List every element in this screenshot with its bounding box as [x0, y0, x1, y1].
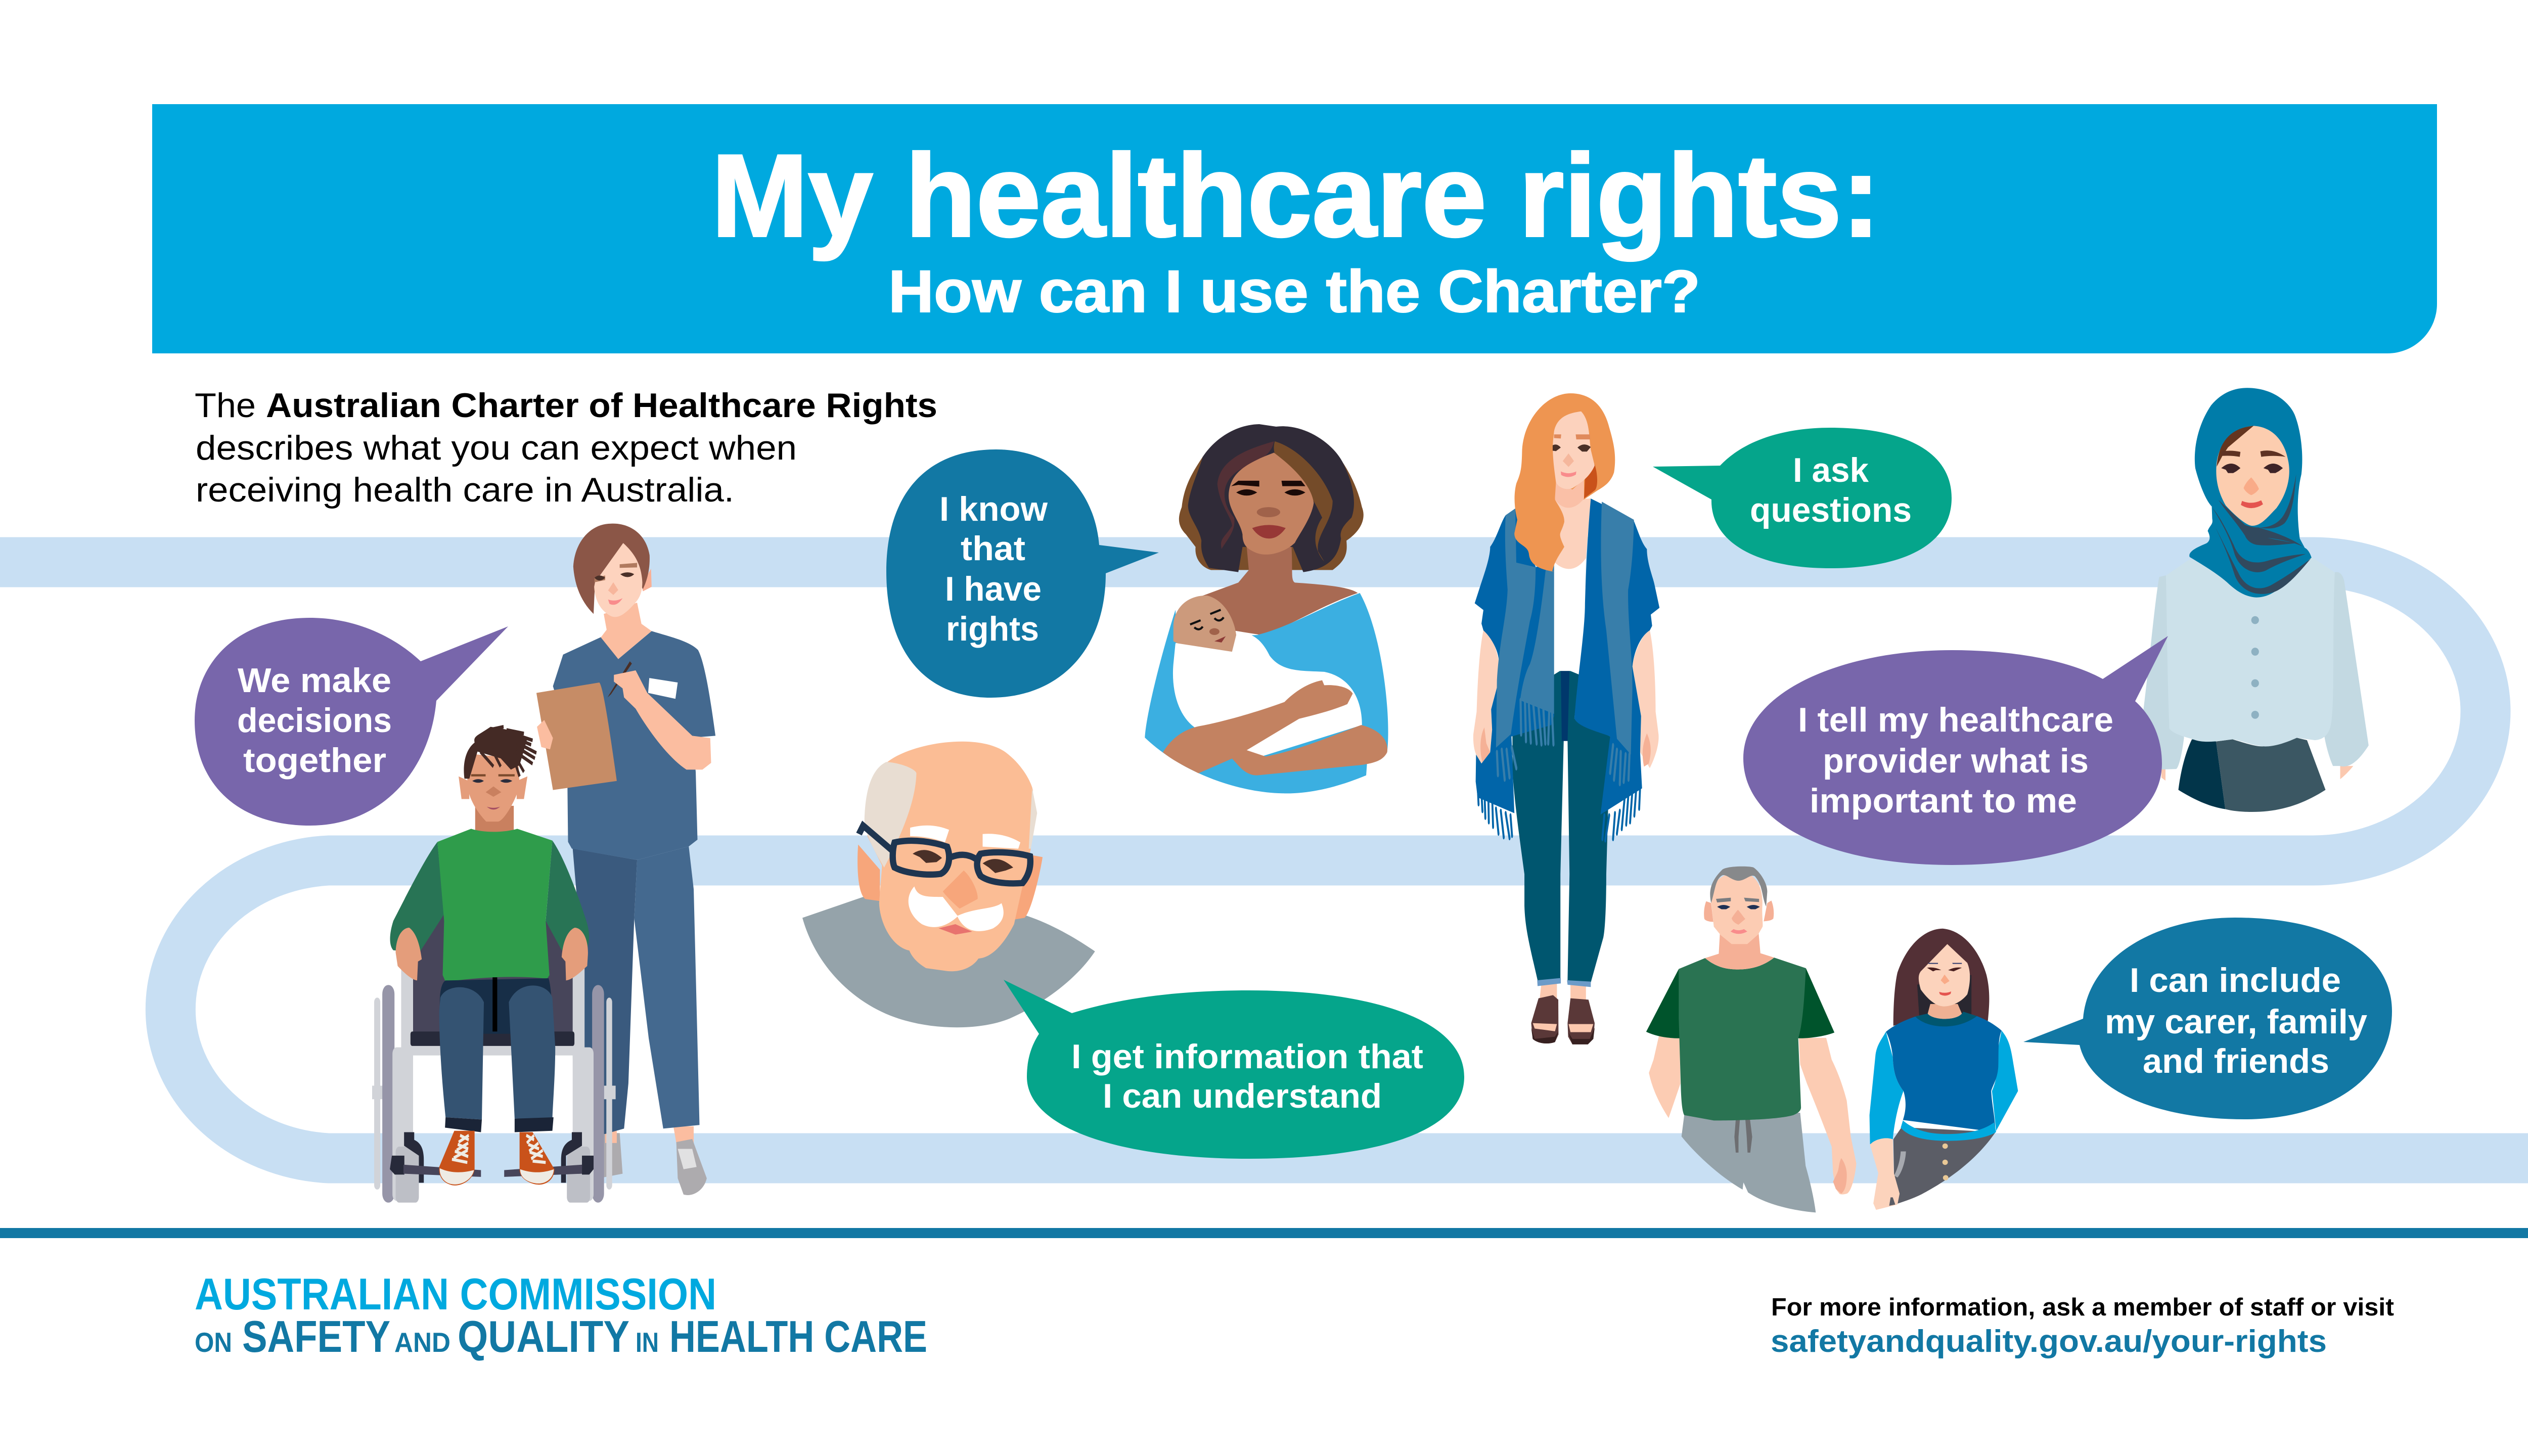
buttons [2251, 616, 2259, 719]
footer contact information [1771, 1294, 2394, 1359]
figure: man in green t-shirt [1646, 867, 1857, 1212]
footer rule [0, 1228, 2528, 1238]
figure: mother with baby [1145, 424, 1388, 793]
speech bubble: I know that I have rights: I know [939, 490, 1048, 528]
commission logo wordmark: HEALTH CARE [669, 1311, 927, 1361]
intro text block: Australian Charter of Healthcare Rights [266, 386, 937, 425]
figure: woman in blue sweater [1870, 929, 2018, 1210]
speech bubble: I know that I have rights: that [961, 529, 1025, 568]
speech bubble: I get information that I can understand [1004, 980, 1464, 1159]
commission logo wordmark: SAFETY [242, 1311, 390, 1361]
footer contact information: safetyandquality.gov.au/your-rights [1771, 1324, 2327, 1359]
scarf folds [2212, 474, 2311, 594]
commission logo wordmark: IN [636, 1327, 659, 1358]
footer contact information: For more information, ask a member of staff or visit [1771, 1294, 2394, 1321]
speech bubble: I tell my healthcare provider: provider what is [1823, 742, 2089, 780]
cardigan [1475, 498, 1659, 814]
intro text block: describes what you can expect when [196, 429, 797, 467]
baby blanket [1173, 631, 1362, 756]
speech bubble: I can include my carer, family and friends [2023, 918, 2392, 1119]
fringe [1477, 700, 1640, 840]
figure: woman with fringed cardigan [1473, 393, 1659, 1044]
speech bubble: we make decisions together: We make [238, 661, 391, 700]
figure: nurse with clipboard [536, 524, 715, 1195]
speech bubble: I ask questions: questions [1750, 491, 1912, 529]
headscarf [2189, 388, 2312, 598]
glasses [859, 826, 1030, 883]
speech bubble: I know that I have rights [886, 449, 1159, 698]
figure: elderly man with glasses [802, 742, 1095, 1027]
speech bubble: I ask questions [1653, 428, 1952, 568]
commission logo wordmark: AND [394, 1327, 450, 1358]
intro text block: receiving health care in Australia. [196, 471, 734, 509]
speech bubble: we make decisions together: decisions [237, 701, 392, 740]
speech bubble: I know that I have rights: rights [946, 610, 1039, 648]
commission logo wordmark: QUALITY [458, 1311, 629, 1361]
speech bubble: we make decisions together: together [243, 741, 386, 780]
speech bubble: we make decisions together [195, 618, 508, 826]
intro text block: The [195, 386, 256, 425]
speech bubble: I tell my healthcare provider [1743, 636, 2168, 865]
speech bubble: I get information that I can understand: I get information that [1071, 1037, 1423, 1076]
commission logo wordmark [195, 1269, 927, 1361]
commission logo wordmark: AUSTRALIAN COMMISSION [195, 1269, 716, 1319]
speech bubble: I ask questions: I ask [1793, 451, 1869, 489]
figure: woman in hijab [2143, 388, 2369, 812]
speech bubble: I can include my carer, family and friends: and friends [2143, 1042, 2329, 1080]
subheading: How can I use the Charter? [888, 258, 1700, 325]
speech bubble: I can include my carer, family and friends: my carer, family [2105, 1003, 2367, 1041]
winding road path [0, 562, 2528, 1158]
blue wrap dress [1145, 593, 1388, 793]
wheelchair frame [372, 914, 616, 1203]
baby head [1173, 596, 1236, 652]
speech bubble: I tell my healthcare provider: I tell my healthcare [1798, 701, 2113, 739]
main heading: My healthcare rights: [711, 130, 1880, 261]
hair and face [1514, 393, 1615, 572]
speech bubble: I get information that I can understand: I can understand [1103, 1077, 1382, 1115]
speech bubble: I can include my carer, family and friends: I can include [2130, 961, 2341, 999]
figure: man in wheelchair [372, 727, 616, 1203]
title banner [152, 104, 2437, 353]
speech bubble: I tell my healthcare provider: important to me [1810, 782, 2077, 820]
green sweater [390, 829, 589, 982]
intro text block [195, 386, 937, 509]
speech bubble: I know that I have rights: I have [945, 570, 1042, 608]
commission logo wordmark: ON [195, 1327, 232, 1358]
